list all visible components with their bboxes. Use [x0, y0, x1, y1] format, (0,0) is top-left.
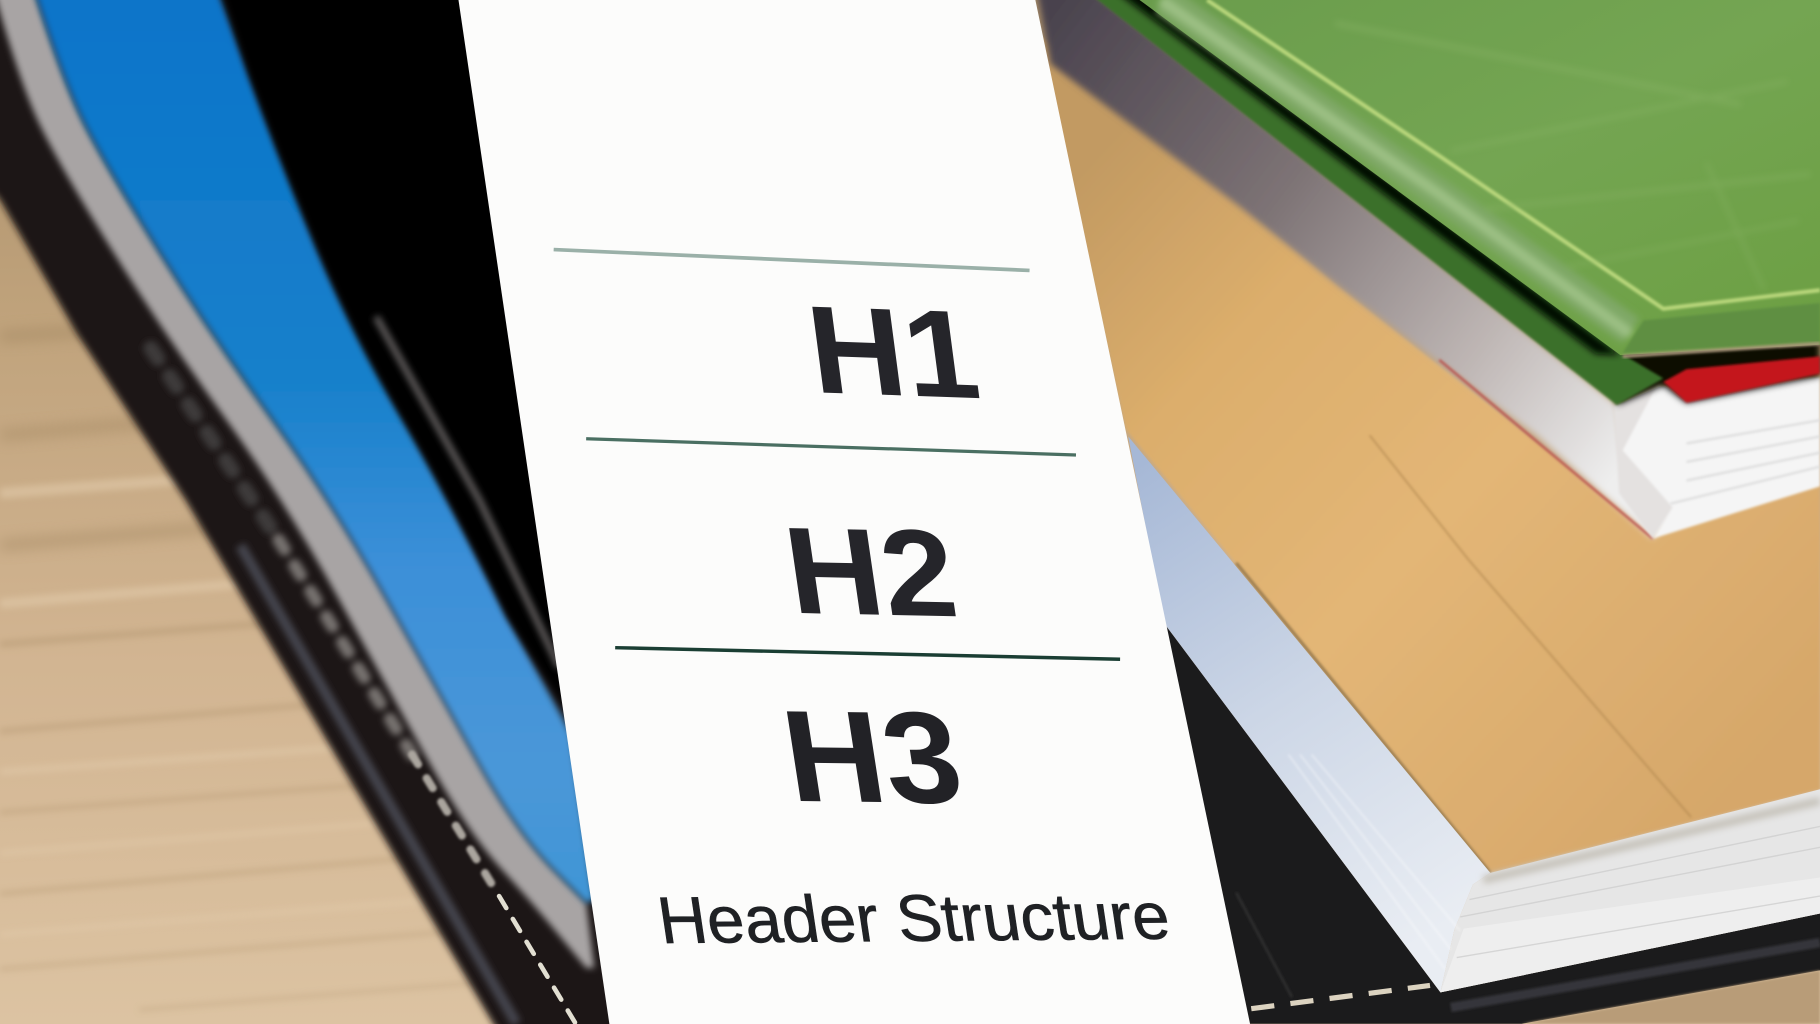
grey folder edge: [0, 0, 594, 968]
heading H2: H2: [777, 502, 965, 643]
black gap under cover: [1617, 337, 1820, 405]
white page block under envelope: [1128, 436, 1820, 992]
dark green board: [1083, 0, 1663, 405]
green cover: [1132, 0, 1820, 355]
black leather folder: [0, 0, 633, 1024]
stitching on folder: [151, 348, 576, 1024]
cover lip: [1623, 303, 1820, 353]
green book with page block: [1037, 0, 1820, 539]
book grey spine: [1037, 0, 1673, 539]
black shadow under cover: [1112, 0, 1620, 355]
divider line 1: [554, 250, 1030, 270]
book pages: [1623, 377, 1820, 539]
dark inner folder with grey line: [221, 0, 566, 710]
blue folder: [34, 0, 594, 903]
leather texture: [1335, 23, 1811, 290]
black folder lower right: [1164, 623, 1820, 1024]
wood corner bottom right: [1522, 970, 1820, 1024]
page corner backing: [1613, 383, 1677, 539]
red bookmark: [1663, 356, 1820, 403]
white header structure card: [458, 0, 1250, 1024]
cover stitching: [1207, 0, 1820, 309]
envelope fold: [1370, 435, 1691, 817]
bottom stitching: [1251, 985, 1430, 1009]
divider line 3: [615, 648, 1120, 659]
heading H3: H3: [773, 682, 971, 831]
divider line 2: [586, 439, 1076, 455]
heading H1: H1: [800, 280, 987, 425]
cover edge highlight: [1161, 0, 1631, 334]
caption: Header Structure: Header Structure: [653, 880, 1175, 958]
tan envelope: [1040, 35, 1820, 873]
